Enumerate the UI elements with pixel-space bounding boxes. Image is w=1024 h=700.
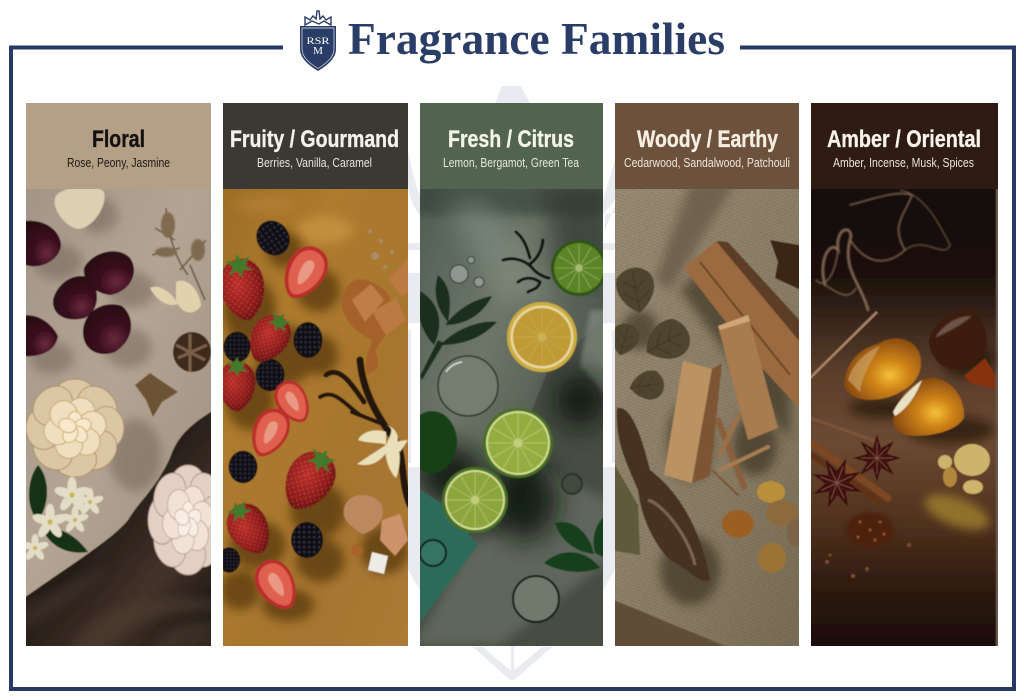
heading: amber: Amber / Oriental bbox=[827, 126, 981, 153]
ground spice bbox=[846, 512, 894, 548]
lemon slice bbox=[507, 302, 577, 372]
vanilla pods bbox=[320, 360, 410, 505]
panel: amber oriental bbox=[803, 103, 1004, 653]
vanilla flower bbox=[357, 425, 408, 478]
panel: floral bbox=[26, 103, 211, 646]
header: amber bbox=[811, 103, 998, 189]
dark bark top right bbox=[770, 240, 805, 292]
petal: cream bbox=[55, 187, 105, 229]
rings lower bbox=[420, 474, 582, 622]
amber large bbox=[844, 338, 921, 400]
subtext: amber: Amber, Incense, Musk, Spices bbox=[833, 156, 974, 170]
smoke bbox=[816, 190, 950, 310]
watermark: faint shield behind panels bbox=[408, 86, 615, 680]
plank long bbox=[684, 241, 805, 414]
header: fresh bbox=[420, 103, 603, 189]
fresh photo bbox=[420, 189, 603, 646]
heading: fruity: Fruity / Gourmand bbox=[230, 126, 399, 153]
peony pale bbox=[146, 464, 211, 576]
leaves bbox=[29, 465, 47, 520]
caramel soft cubes bbox=[344, 495, 408, 556]
strawberries halved bbox=[252, 246, 328, 610]
logo bbox=[300, 11, 336, 71]
grey linen cloth bbox=[420, 337, 603, 646]
gold powder bbox=[920, 487, 994, 537]
incense stick bbox=[805, 312, 877, 383]
blackberries bbox=[218, 214, 323, 573]
bark bbox=[617, 408, 710, 581]
dried petals bbox=[135, 373, 178, 417]
subtext: fresh: Lemon, Bergamot, Green Tea bbox=[443, 156, 579, 170]
heading: woody: Woody / Earthy bbox=[637, 126, 779, 153]
spice specks bbox=[825, 543, 911, 578]
logo letters: RSR bbox=[306, 37, 330, 47]
subtext: floral: Rose, Peony, Jasmine bbox=[67, 156, 170, 170]
caramel dot bbox=[351, 544, 363, 556]
dried sprigs bbox=[152, 208, 206, 300]
dried flower cream bbox=[150, 281, 201, 313]
heading: fresh: Fresh / Citrus bbox=[448, 126, 574, 153]
cinnamon bbox=[812, 445, 888, 502]
subtext: woody: Cedarwood, Sandalwood, Patchouli bbox=[624, 156, 790, 170]
frankincense resin bbox=[938, 444, 990, 494]
amber shadows bbox=[849, 342, 994, 444]
lime slice lower bbox=[442, 467, 508, 533]
satin cloth bbox=[20, 408, 217, 653]
teal cloth bbox=[420, 490, 478, 622]
star anise bbox=[803, 434, 901, 517]
title: Fragrance Families bbox=[348, 13, 725, 64]
tea leaf branch bbox=[418, 275, 497, 380]
amber dark bbox=[929, 309, 987, 369]
logo letter M: M bbox=[313, 45, 323, 57]
jasmine bbox=[21, 477, 104, 561]
dark lime bbox=[420, 410, 458, 473]
moss leaf bbox=[609, 455, 640, 555]
icon: shield bbox=[300, 26, 336, 71]
petals: dark rose bbox=[20, 221, 134, 356]
plank front bbox=[664, 361, 712, 483]
lower incense stick bbox=[805, 416, 875, 441]
leaves bbox=[608, 265, 696, 403]
sugar cube bbox=[368, 552, 388, 574]
icon: crown bbox=[305, 11, 331, 25]
header: woody bbox=[615, 103, 799, 189]
peony cream bbox=[25, 378, 125, 478]
black tea leaves bbox=[503, 232, 549, 292]
amber lower bbox=[893, 378, 964, 436]
water ring bbox=[438, 356, 498, 416]
amber photo bbox=[803, 183, 1004, 653]
resins bbox=[722, 481, 805, 573]
fruity photo bbox=[215, 183, 414, 653]
dark shadow bbox=[415, 372, 606, 540]
plank upright bbox=[718, 315, 778, 440]
water drops bbox=[450, 256, 484, 287]
heading: floral: Floral bbox=[92, 126, 145, 153]
panel: woody earthy bbox=[608, 103, 805, 653]
caramel bbox=[342, 258, 408, 374]
header: fruity bbox=[223, 103, 408, 189]
amber small bbox=[964, 358, 995, 389]
header: floral bbox=[26, 103, 211, 189]
panel: fruity gourmand bbox=[215, 103, 414, 653]
subtext: fruity: Berries, Vanilla, Caramel bbox=[257, 156, 372, 170]
sticks bbox=[712, 416, 768, 495]
pine cone bbox=[173, 332, 211, 372]
strawberries whole bbox=[223, 254, 336, 554]
burlap bbox=[609, 183, 805, 653]
mint leaves bbox=[544, 512, 609, 572]
woody photo bbox=[608, 183, 805, 653]
panel: fresh citrus bbox=[420, 103, 603, 646]
lime slice top bbox=[551, 240, 607, 296]
caramel drops bbox=[368, 229, 394, 269]
floral photo bbox=[26, 189, 211, 646]
lime slice middle bbox=[483, 408, 553, 478]
